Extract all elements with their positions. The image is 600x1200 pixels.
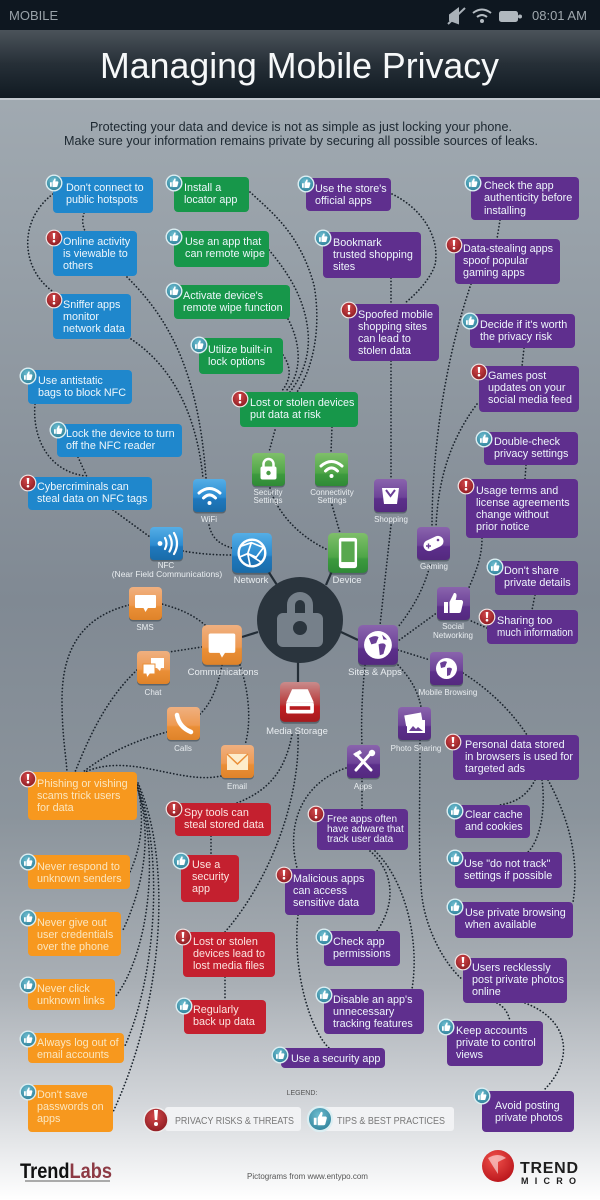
risk: spy tools: steal stored data <box>184 819 264 831</box>
hub: Mobile Browsing: Mobile Browsing <box>419 688 477 697</box>
footer logo: Trend Micro: MICRO <box>521 1176 576 1186</box>
risk: sharing too much <box>479 609 578 644</box>
hub: Connectivity Settings: Settings <box>318 496 346 505</box>
dotted connectors: sites and apps branch <box>294 194 575 1091</box>
risk: usage terms: Usage terms and <box>476 485 558 497</box>
risk: malicious apps <box>276 867 375 915</box>
tip: do not track: Use "do not track" <box>464 858 550 870</box>
hub: Chat: Chat <box>145 688 162 697</box>
risk: usage terms: change without <box>476 509 549 521</box>
risk: free apps adware <box>308 806 408 850</box>
hub: Security Settings: Security <box>254 488 282 497</box>
hub: Media Storage <box>266 682 328 737</box>
tip: check permissions <box>316 929 400 966</box>
callouts: device (green) <box>166 175 358 427</box>
tip: keep accounts private: private to control <box>456 1037 536 1049</box>
hub: Apps <box>347 745 380 791</box>
risk: lost media files <box>175 929 275 977</box>
hub: Sites and Apps: Sites & Apps <box>348 667 402 678</box>
risk: lost or stolen devices: Lost or stolen devices <box>250 397 355 409</box>
tip: bookmark: trusted shopping <box>333 249 413 261</box>
tip: antistatic bags: Use antistatic <box>38 375 103 387</box>
risk: online activity <box>46 230 137 276</box>
tip: clear cache: and cookies <box>465 821 523 833</box>
tip: check authenticity: installing <box>484 205 526 217</box>
risk: personal data in browsers: in browsers is used for <box>465 751 573 763</box>
tip: unknown links <box>20 977 115 1010</box>
tip: antistatic bags <box>20 368 132 404</box>
footer credit: Pictograms from www.entypo.com <box>247 1172 368 1181</box>
risk: sharing too much: much information <box>497 627 573 639</box>
tip: double-check: Double-check <box>494 436 561 448</box>
risk: sniffer apps: Sniffer apps <box>63 299 121 311</box>
hub: Photo Sharing: Photo Sharing <box>391 744 441 753</box>
hub: SMS <box>129 587 162 632</box>
footer logo: Trend Micro: TREND <box>520 1160 578 1177</box>
tip: official apps: Use the store's <box>315 183 387 195</box>
tip: official apps <box>298 176 391 211</box>
central lock <box>257 577 343 663</box>
intro text: Make sure your information remains private by securing all possible sources of leaks. <box>64 134 538 148</box>
tip: private browsing <box>447 899 573 938</box>
tip: bookmark: Bookmark <box>333 237 382 249</box>
tip: remote wipe app: can remote wipe <box>185 248 265 260</box>
tip: double-check <box>476 431 578 465</box>
risk: private photos: Users recklessly <box>472 962 551 974</box>
callouts: media storage (red) <box>166 801 275 1034</box>
tip: clear cache: Clear cache <box>465 809 523 821</box>
icon: wifi status <box>473 10 491 22</box>
tip: log out <box>20 1031 124 1063</box>
tip: keep accounts private <box>438 1019 543 1066</box>
tip: back up: back up data <box>193 1016 255 1028</box>
risk: phishing: scams trick users <box>37 790 121 802</box>
risk: games post: Games post <box>488 370 546 382</box>
risk: data-stealing apps: gaming apps <box>463 267 525 279</box>
tip: user credentials: user credentials <box>37 929 114 941</box>
tip: official apps: official apps <box>315 195 372 207</box>
risk: games post: updates on your <box>488 382 566 394</box>
tip: bookmark: sites <box>333 261 356 273</box>
tip: unknown senders: unknown senders <box>37 873 122 885</box>
tip: lock the device <box>50 422 182 457</box>
legend: tips and best practices <box>308 1107 454 1131</box>
hub: Device: Device <box>332 575 362 586</box>
risk: usage terms <box>458 478 578 538</box>
hub: Email <box>221 745 254 791</box>
risk: private photos: post private photos <box>472 974 565 986</box>
hub: Network: Network <box>234 575 269 586</box>
risk: spy tools <box>166 801 271 836</box>
hub: Security Settings: Settings <box>254 496 282 505</box>
tip: unknown senders: Never respond to <box>37 861 120 873</box>
icon: padlock <box>277 596 323 647</box>
tip: remote wipe function <box>166 283 290 319</box>
hub: Photo Sharing <box>391 707 441 753</box>
dotted connectors: network branch <box>28 194 232 555</box>
tip: private details <box>487 559 578 595</box>
risk: lost or stolen devices: put data at risk <box>250 409 321 421</box>
icon: muted sound <box>448 8 465 24</box>
tip: remote wipe function: remote wipe function <box>183 302 283 314</box>
risk: phishing <box>20 771 137 820</box>
hub: Gaming: Gaming <box>420 562 448 571</box>
hub: Shopping: Shopping <box>374 515 408 524</box>
callouts: communications (orange) <box>20 771 137 1132</box>
hub: WiFi <box>193 479 226 524</box>
tip: privacy risk: Decide if it's worth <box>480 319 567 331</box>
tip: user credentials: Never give out <box>37 917 107 929</box>
risk: spoofed shopping: stolen data <box>358 345 411 357</box>
tip: check permissions: permissions <box>333 948 391 960</box>
hub: Email: Email <box>227 782 247 791</box>
footer logo: Trend Micro <box>482 1150 578 1186</box>
tip: don't save passwords: Don't save <box>37 1089 88 1101</box>
hub: WiFi: WiFi <box>201 515 217 524</box>
tip: private browsing: when available <box>464 919 536 931</box>
risk: malicious apps: sensitive data <box>293 897 359 909</box>
hub: Gaming <box>417 527 450 571</box>
tip: back up <box>176 998 266 1034</box>
tip: private browsing: Use private browsing <box>465 907 566 919</box>
hub: Shopping <box>374 479 408 524</box>
tip: unknown links: unknown links <box>37 995 105 1007</box>
tip: public hotspots: public hotspots <box>66 194 139 206</box>
tip: log out: Always log out of <box>37 1037 120 1049</box>
hub: NFC: NFC <box>158 561 174 570</box>
tip: check authenticity <box>465 175 579 220</box>
risk: spoofed shopping <box>341 302 439 361</box>
tip: security app: app <box>192 883 210 895</box>
legend: privacy risks and threats: PRIVACY RISKS & THREATS <box>175 1116 294 1127</box>
hub: Connectivity Settings: Connectivity <box>310 488 354 497</box>
intro text: Protecting your data and device is not as simple as just locking your phone. <box>90 120 512 134</box>
risk: sharing too much: Sharing too <box>497 615 552 627</box>
tip: unknown senders <box>20 854 130 889</box>
risk: personal data in browsers <box>445 734 579 780</box>
risk: sniffer apps: monitor <box>63 311 99 323</box>
risk: malicious apps: can access <box>293 885 348 897</box>
risk: phishing: for data <box>37 802 74 814</box>
tip: built-in lock: Utilize built-in <box>208 344 272 356</box>
tip: disable tracking: tracking features <box>333 1018 413 1030</box>
tip: disable tracking <box>316 987 424 1034</box>
risk: data-stealing apps: spoof popular <box>463 255 529 267</box>
risk: spy tools: Spy tools can <box>184 807 249 819</box>
tip: user credentials <box>20 910 121 956</box>
risk: lost media files: Lost or stolen <box>193 936 258 948</box>
tip: antistatic bags: bags to block NFC <box>38 387 126 399</box>
risk: personal data in browsers: targeted ads <box>465 763 526 775</box>
risk: spoofed shopping: Spoofed mobile <box>358 309 433 321</box>
risk: personal data in browsers: Personal data stored <box>465 739 565 751</box>
tip: double-check: privacy settings <box>494 448 569 460</box>
tip: locator app: locator app <box>184 194 237 206</box>
tip: do not track <box>447 850 562 888</box>
risk: lost or stolen devices <box>232 391 358 427</box>
risk: lost media files: lost media files <box>193 960 265 972</box>
risk: games post: social media feed <box>488 394 572 406</box>
hub: Communications <box>188 625 259 678</box>
tip: unknown links: Never click <box>37 983 90 995</box>
tip: lock the device: Lock the device to turn <box>66 428 175 440</box>
title: Managing Mobile Privacy <box>100 45 499 86</box>
status bar <box>0 0 600 30</box>
legend <box>144 1090 454 1132</box>
status label: mobile: MOBILE <box>9 8 58 23</box>
hub: SMS: SMS <box>136 623 154 632</box>
risk: spoofed shopping: shopping sites <box>358 321 428 333</box>
risk: cybercriminals <box>20 475 152 510</box>
legend: tips and best practices: TIPS & BEST PRACTICES <box>337 1116 445 1127</box>
tip: lock the device: off the NFC reader <box>66 440 156 452</box>
hub: Apps: Apps <box>354 782 372 791</box>
tip: keep accounts private: views <box>456 1049 484 1061</box>
risk: online activity: is viewable to <box>63 248 128 260</box>
dotted connectors: device branch <box>250 192 340 550</box>
risk: private photos: online <box>472 986 501 998</box>
tip: user credentials: over the phone <box>37 941 109 953</box>
risk: private photos <box>455 954 567 1003</box>
risk: free apps adware: have adware that <box>327 824 404 835</box>
tip: avoid posting: Avoid posting <box>495 1100 560 1112</box>
tip: public hotspots <box>46 175 153 213</box>
tip: remote wipe app <box>166 229 269 267</box>
tip: keep accounts private: Keep accounts <box>456 1025 528 1037</box>
risk: sniffer apps <box>46 292 131 339</box>
tip: don't save passwords <box>20 1084 113 1132</box>
tip: do not track: settings if possible <box>464 870 552 882</box>
risk: games post <box>471 364 579 412</box>
risk: data-stealing apps: Data-stealing apps <box>463 243 554 255</box>
footer logo: TrendLabs: TrendLabs <box>20 1160 112 1183</box>
tip: security app: security <box>192 871 230 883</box>
hub: Security Settings <box>252 453 285 505</box>
risk: usage terms: license agreements <box>476 497 570 509</box>
hub: Social Networking: Networking <box>433 631 473 640</box>
tip: remote wipe function: Activate device's <box>183 290 264 302</box>
hub: Calls: Calls <box>174 744 192 753</box>
status time: 08:01 AM <box>532 8 587 23</box>
risk: lost media files: devices lead to <box>193 948 265 960</box>
hub: Device <box>328 533 368 586</box>
hub: Communications: Communications <box>188 667 259 678</box>
risk: usage terms: prior notice <box>476 521 529 533</box>
hub: Sites and Apps <box>348 625 402 678</box>
hub: Social Networking <box>433 587 473 640</box>
tip: log out: email accounts <box>37 1049 110 1061</box>
tip: check authenticity: authenticity before <box>484 192 572 204</box>
tip: security app <box>173 853 239 902</box>
tip: remote wipe app: Use an app that <box>185 236 261 248</box>
tip: disable tracking: unnecessary <box>333 1006 395 1018</box>
callouts: network (blue) <box>20 175 182 510</box>
risk: data-stealing apps <box>446 237 560 284</box>
dotted connectors: media storage branch <box>211 735 298 1000</box>
hub: NFC <box>112 527 222 579</box>
tip: check authenticity: Check the app <box>484 180 554 192</box>
tip: built-in lock <box>191 337 283 374</box>
tip: clear cache <box>447 803 530 838</box>
tip: check permissions: Check app <box>333 936 385 948</box>
tip: private details: Don't share <box>504 565 559 577</box>
risk: online activity: Online activity <box>63 236 131 248</box>
tip: security app: Use a <box>192 859 220 871</box>
tip: security app <box>272 1047 385 1068</box>
solid spokes from central lock <box>242 571 358 682</box>
risk: cybercriminals: steal data on NFC tags <box>37 493 148 505</box>
tip: private details: private details <box>504 577 571 589</box>
hub: Connectivity Settings <box>310 453 354 505</box>
risk: phishing: Phishing or vishing <box>37 778 128 790</box>
risk: cybercriminals: Cybercriminals can <box>37 481 129 493</box>
tip: avoid posting: private photos <box>495 1112 563 1124</box>
tip: back up: Regularly <box>193 1004 239 1016</box>
tip: public hotspots: Don't connect to <box>66 182 144 194</box>
tip: don't save passwords: apps <box>37 1113 61 1125</box>
legend: privacy risks and threats <box>144 1107 301 1132</box>
tip: privacy risk: the privacy risk <box>480 331 553 343</box>
tip: security app: Use a security app <box>291 1053 380 1065</box>
title band <box>0 30 600 100</box>
risk: online activity: others <box>63 260 94 272</box>
risk: free apps adware: track user data <box>327 834 394 845</box>
risk: sniffer apps: network data <box>63 323 125 335</box>
risk: malicious apps: Malicious apps <box>293 873 365 885</box>
risk: free apps adware: Free apps often <box>327 814 397 825</box>
tip: disable tracking: Disable an app's <box>333 994 413 1006</box>
icon: battery <box>499 11 522 22</box>
tip: built-in lock: lock options <box>208 356 266 368</box>
callouts: sites and apps (purple) <box>272 175 579 1132</box>
legend heading: LEGEND: <box>287 1090 317 1097</box>
tip: privacy risk <box>462 313 575 348</box>
tip: locator app <box>166 175 249 212</box>
risk: spoofed shopping: can lead to <box>358 333 411 345</box>
tip: don't save passwords: passwords on <box>37 1101 104 1113</box>
tip: bookmark <box>315 230 421 278</box>
hub: Calls <box>167 707 200 753</box>
tip: locator app: Install a <box>184 182 221 194</box>
dotted connectors: communications branch <box>62 604 249 1112</box>
hub: Chat <box>137 651 170 697</box>
hub: Social Networking: Social <box>442 622 464 631</box>
tip: avoid posting <box>474 1088 574 1132</box>
hub: Media Storage: Media Storage <box>266 726 328 737</box>
hub: Network <box>232 533 272 586</box>
hub: Mobile Browsing <box>419 652 477 697</box>
hub: NFC: (Near Field Communications) <box>112 569 222 579</box>
